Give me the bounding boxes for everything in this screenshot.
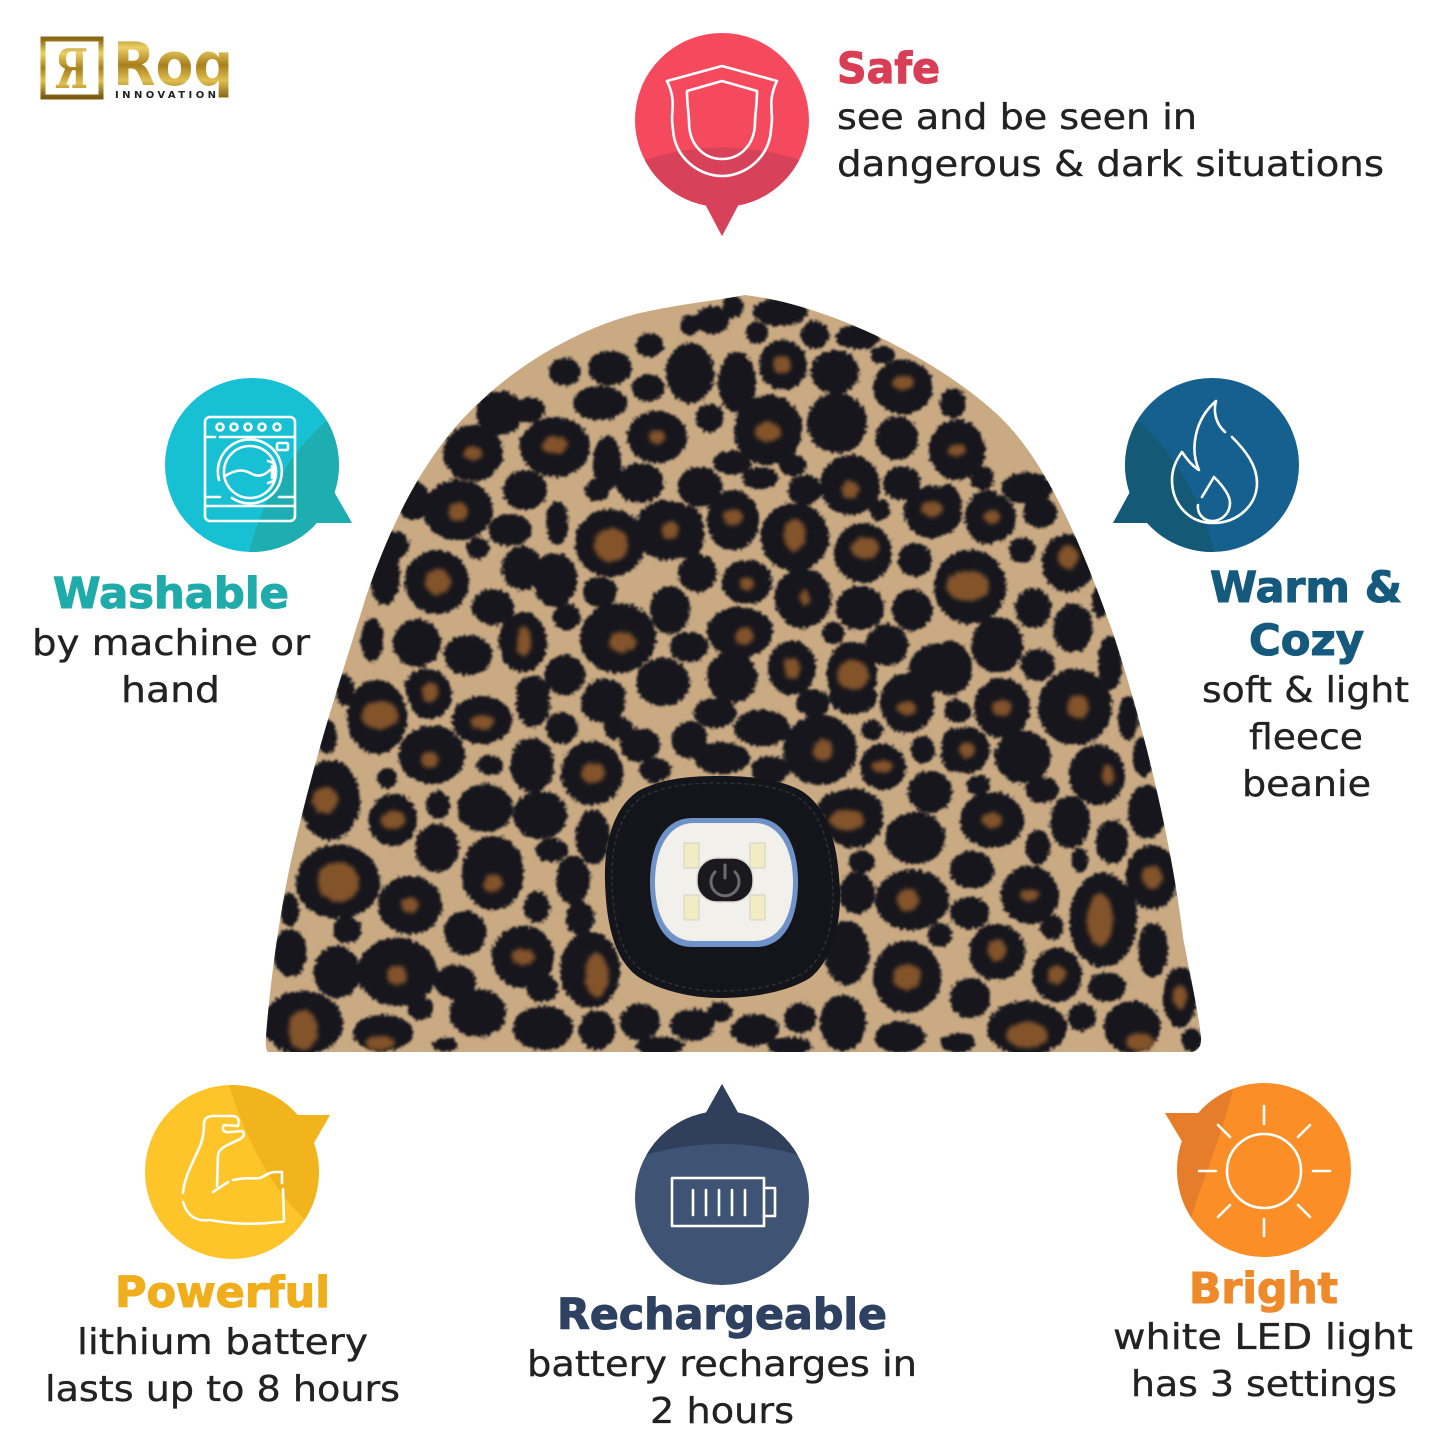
- text: powerful description: [45, 1322, 400, 1410]
- text: bright description: white LED light: [1113, 1317, 1413, 1358]
- text: safe description: [837, 97, 1384, 185]
- flame outline: [1172, 401, 1257, 523]
- text: rechargeable description: 2 hours: [650, 1391, 794, 1432]
- leopard fleece fabric: [250, 285, 1220, 1060]
- text: warm description: soft & light: [1202, 670, 1409, 711]
- LED window: [650, 818, 798, 947]
- text: warm description: fleece: [1249, 717, 1363, 758]
- text: safe description: see and be seen in: [837, 97, 1197, 138]
- text: bright description: has 3 settings: [1131, 1364, 1397, 1405]
- icon: safe shield bubble: [630, 30, 815, 240]
- logo: Roq Innovation: INNOVATION: [115, 90, 216, 101]
- heading: Bright: Bright: [1189, 1264, 1338, 1314]
- text: powerful description: lithium battery: [77, 1322, 368, 1363]
- text: bright description: [1113, 1317, 1413, 1405]
- arm outline: [183, 1116, 284, 1224]
- logo: Roq Innovation: Я: [55, 37, 88, 101]
- icon: battery bubble: [630, 1080, 815, 1290]
- headlamp leather patch: [605, 776, 840, 998]
- icon: sun bubble: [1165, 1083, 1351, 1257]
- text: warm description: beanie: [1242, 764, 1371, 805]
- text: warm description: [1202, 670, 1409, 805]
- icon: flexed arm bubble: [145, 1085, 330, 1259]
- heading: Rechargeable: Rechargeable: [557, 1290, 887, 1340]
- battery outline: [672, 1178, 775, 1226]
- text: powerful description: lasts up to 8 hours: [45, 1369, 400, 1410]
- heading: Warm & Cozy: [1210, 563, 1402, 666]
- logo: Roq Innovation: [43, 30, 233, 101]
- heading: Warm & Cozy: Warm &: [1210, 563, 1402, 613]
- washing machine outline: [205, 417, 295, 521]
- text: washable description: hand: [121, 670, 220, 711]
- heading: Safe: Safe: [837, 44, 940, 94]
- sun outline: [1199, 1106, 1330, 1236]
- icon: flame bubble: [1113, 378, 1299, 552]
- heading: Washable: Washable: [53, 569, 289, 619]
- text: safe description: dangerous & dark situations: [837, 144, 1384, 185]
- heading: Warm & Cozy: Cozy: [1249, 616, 1364, 666]
- text: washable description: by machine or: [32, 623, 310, 664]
- icon: washing machine bubble: [165, 378, 352, 552]
- text: washable description: [32, 623, 310, 711]
- heading: Powerful: Powerful: [115, 1268, 330, 1318]
- logo: Roq Innovation: Roq: [113, 30, 233, 100]
- text: rechargeable description: battery recharges in: [527, 1344, 917, 1385]
- beanie with leopard print and headlamp: [250, 285, 1220, 1060]
- text: rechargeable description: [527, 1344, 917, 1432]
- shield outline: [667, 66, 777, 176]
